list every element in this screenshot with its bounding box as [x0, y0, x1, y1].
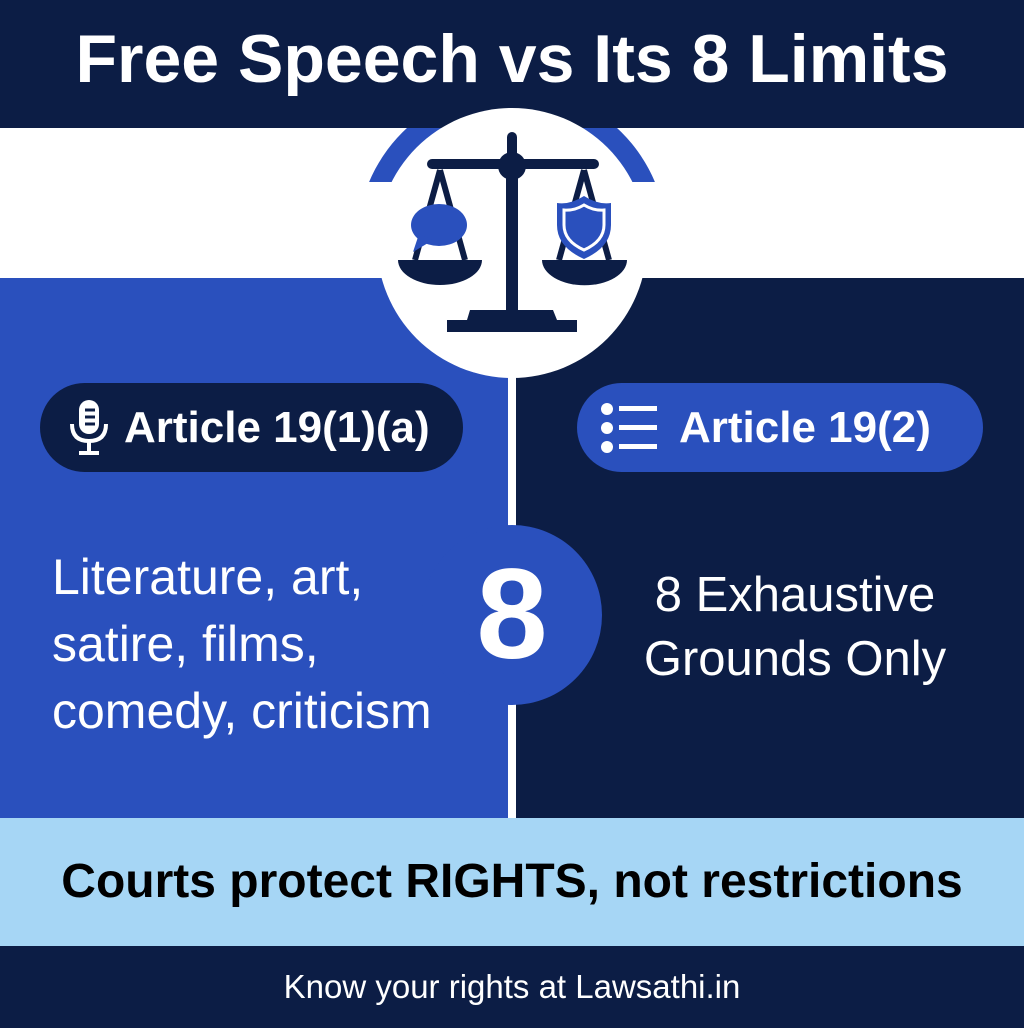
center badge: 8: 8	[476, 543, 548, 686]
icon: shield	[557, 196, 611, 259]
pill: Article 19(2)	[577, 383, 983, 472]
white band	[0, 128, 1024, 278]
divider line	[508, 360, 516, 818]
callout band: Courts protect RIGHTS, not restrictions	[61, 855, 963, 908]
pill: Article 19(1)(a)	[40, 383, 463, 472]
text: protected expression: comedy, criticism	[52, 683, 432, 739]
title: Free Speech vs Its 8 Limits	[75, 21, 949, 97]
blue ring accent	[369, 128, 655, 182]
text: exhaustive grounds	[644, 568, 946, 686]
text: exhaustive grounds: Grounds Only	[644, 632, 946, 686]
header band	[0, 0, 1024, 128]
footer: Know your rights at Lawsathi.in	[284, 968, 740, 1005]
icon: scale of justice	[377, 108, 647, 378]
center badge: 8	[422, 525, 602, 705]
footer	[0, 946, 1024, 1024]
text: protected expression: Literature, art,	[52, 549, 363, 605]
right panel	[512, 278, 1024, 818]
callout band	[0, 818, 1024, 946]
icon: microphone	[70, 400, 108, 455]
text: protected expression: satire, films,	[52, 616, 319, 672]
pill: Article 19(2): Article 19(2)	[679, 402, 931, 452]
left panel	[0, 278, 512, 818]
pill: Article 19(1)(a): Article 19(1)(a)	[124, 402, 430, 452]
icon: list	[601, 403, 657, 453]
icon: speech bubble	[411, 204, 467, 252]
text: protected expression	[52, 549, 432, 739]
text: exhaustive grounds: 8 Exhaustive	[655, 568, 935, 622]
